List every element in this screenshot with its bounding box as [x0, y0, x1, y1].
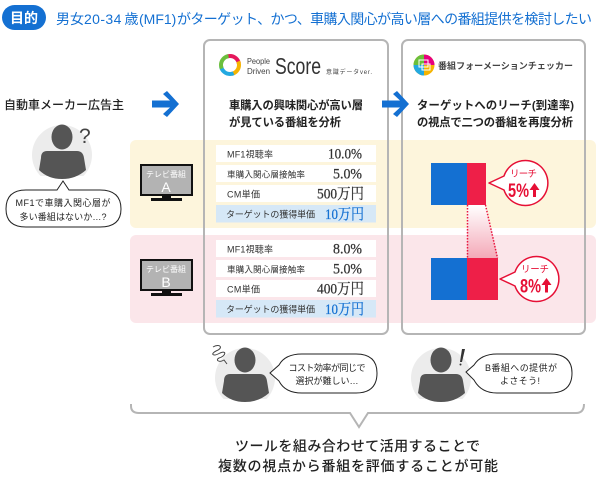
- summary text: ツールを組み合わせて活用することで: [235, 438, 480, 454]
- logo: People Driven Score: Driven: [247, 66, 270, 76]
- callout: reach 8%: 8%: [520, 276, 541, 298]
- checker panel description: の視点で二つの番組を再度分析: [417, 115, 573, 129]
- table: program A metrics: 10.0%: [328, 146, 362, 162]
- objective heading: がターゲット、かつ、車購入関心が高い層への番組提供を検討したい: [177, 11, 592, 27]
- callout: reach 8%: [500, 256, 559, 301]
- advertiser label: 自動車メーカー広告主: [4, 97, 124, 112]
- speech bubble: advertiser question: MF1で車購入関心層が: [16, 197, 110, 208]
- checker panel description: [417, 98, 574, 129]
- checker panel description: ターゲットへのリーチ(到達率): [417, 98, 574, 112]
- summary text: 複数の視点から番組を評価することが可能: [218, 458, 498, 474]
- objective heading: 歳: [124, 11, 138, 27]
- band: program B: [130, 235, 596, 323]
- table: program A metrics: CM単価: [227, 188, 260, 200]
- speech bubble: advertiser question: 多い番組はないか…?: [20, 211, 106, 222]
- panel: program formation checker: [402, 40, 585, 334]
- icon: TV B: テレビ番組: [146, 264, 186, 274]
- table: program B metrics: 8.0%: [333, 242, 362, 258]
- table: program A metrics: ターゲットの獲得単価: [226, 208, 315, 220]
- callout: reach 5%: [489, 161, 548, 205]
- logo: People Driven Score: 意識データver.: [326, 68, 372, 76]
- table: program B metrics: 400万円: [317, 280, 364, 298]
- logo: People Driven Score: People: [247, 56, 270, 66]
- connector between reach bars: [467, 205, 498, 258]
- objective heading: 20-34: [84, 11, 122, 27]
- table: program A metrics: 10万円: [325, 206, 364, 223]
- objective heading: (MF1): [139, 11, 176, 27]
- icon: TV A: テレビ番組: [146, 169, 186, 179]
- arrow: score to checker: [382, 91, 409, 117]
- objective heading: 男女: [56, 11, 84, 27]
- objective badge: [2, 5, 46, 30]
- summary text: [218, 438, 498, 474]
- speech bubble: program B: B番組への提供が: [485, 362, 557, 373]
- table: program B metrics: 車購入関心層接触率: [227, 264, 305, 274]
- objective badge: 目的: [10, 10, 38, 26]
- score panel description: が見ている番組を分析: [229, 115, 341, 129]
- icon: TV B: B: [161, 274, 171, 290]
- table: program A metrics: 5.0%: [333, 166, 362, 182]
- table: program A metrics: [216, 145, 376, 223]
- table: program A metrics: 車購入関心層接触率: [227, 168, 305, 180]
- speech bubble: cost efficiency: [270, 354, 377, 393]
- callout: reach 5%: 5%: [508, 181, 529, 202]
- table: program B metrics: [216, 240, 376, 318]
- icon: TV A: A: [161, 179, 171, 195]
- speech bubble: program B: よさそう!: [500, 376, 540, 386]
- table: program A metrics: 500万円: [317, 186, 364, 202]
- speech bubble: program B: [466, 354, 572, 393]
- arrow: advertiser to score: [152, 91, 179, 117]
- logo: program formation checker: 番組フォーメーションチェッカー: [438, 60, 573, 71]
- callout: reach 8%: リーチ: [521, 264, 549, 276]
- icon: TV A: [141, 165, 192, 201]
- table: program B metrics: 10万円: [325, 301, 364, 318]
- table: program B metrics: 5.0%: [333, 262, 362, 278]
- logo: People Driven Score: Score: [275, 53, 321, 79]
- person: advertiser: ?: [79, 125, 91, 148]
- icon: TV B: [141, 260, 192, 296]
- band: program A: [130, 140, 596, 228]
- speech bubble: cost efficiency: コスト効率が同じで: [288, 362, 366, 373]
- table: program A metrics: MF1視聴率: [227, 148, 273, 160]
- logo: People Driven Score: [221, 53, 372, 79]
- table: program B metrics: ターゲットの獲得単価: [226, 304, 315, 314]
- person: satisfied planner: [411, 348, 471, 402]
- score panel description: [229, 98, 363, 129]
- score panel description: 車購入の興味関心が高い層: [229, 98, 363, 112]
- callout: reach 5%: リーチ: [510, 169, 537, 180]
- logo: program formation checker: [414, 54, 573, 76]
- table: program B metrics: MF1視聴率: [227, 244, 273, 254]
- bar: reach B: [431, 258, 498, 300]
- person: advertiser: [32, 124, 92, 179]
- summary bracket: [131, 404, 584, 427]
- bar: reach A: [431, 163, 486, 205]
- table: program B metrics: CM単価: [227, 284, 260, 294]
- speech bubble: advertiser question: [6, 181, 121, 227]
- person: puzzled planner: [213, 346, 275, 402]
- panel: People Driven Score: [204, 40, 388, 334]
- speech bubble: cost efficiency: 選択が難しい…: [296, 375, 358, 386]
